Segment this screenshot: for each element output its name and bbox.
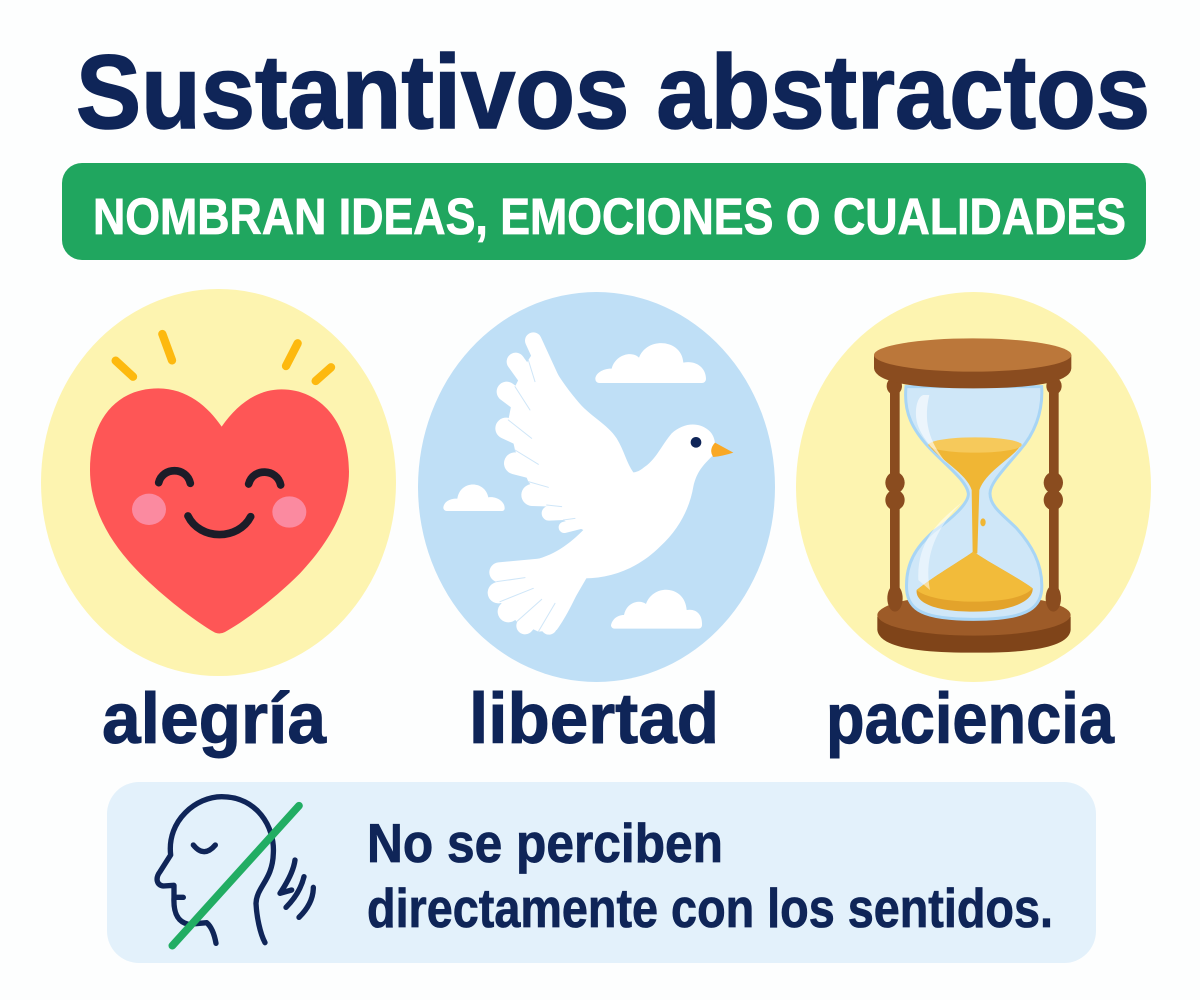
icon: smiling heart — [90, 334, 349, 634]
label: libertad: libertad — [469, 680, 719, 759]
title: Sustantivos abstractos — [76, 34, 1150, 151]
note text — [367, 812, 1053, 939]
label: alegría: alegría — [102, 680, 326, 759]
note text: directamente con los sentidos. — [367, 877, 1053, 939]
subtitle banner — [62, 163, 1146, 260]
icon: dove and clouds — [443, 340, 733, 632]
icon: head with crossed-out senses — [157, 797, 313, 946]
panel: alegría — [41, 289, 396, 759]
panel: paciencia — [796, 292, 1151, 759]
icon: hourglass — [874, 338, 1071, 653]
panel: senses note — [107, 782, 1096, 963]
panel: libertad — [418, 292, 775, 759]
note text: No se perciben — [367, 812, 723, 874]
label: paciencia: paciencia — [826, 680, 1114, 759]
